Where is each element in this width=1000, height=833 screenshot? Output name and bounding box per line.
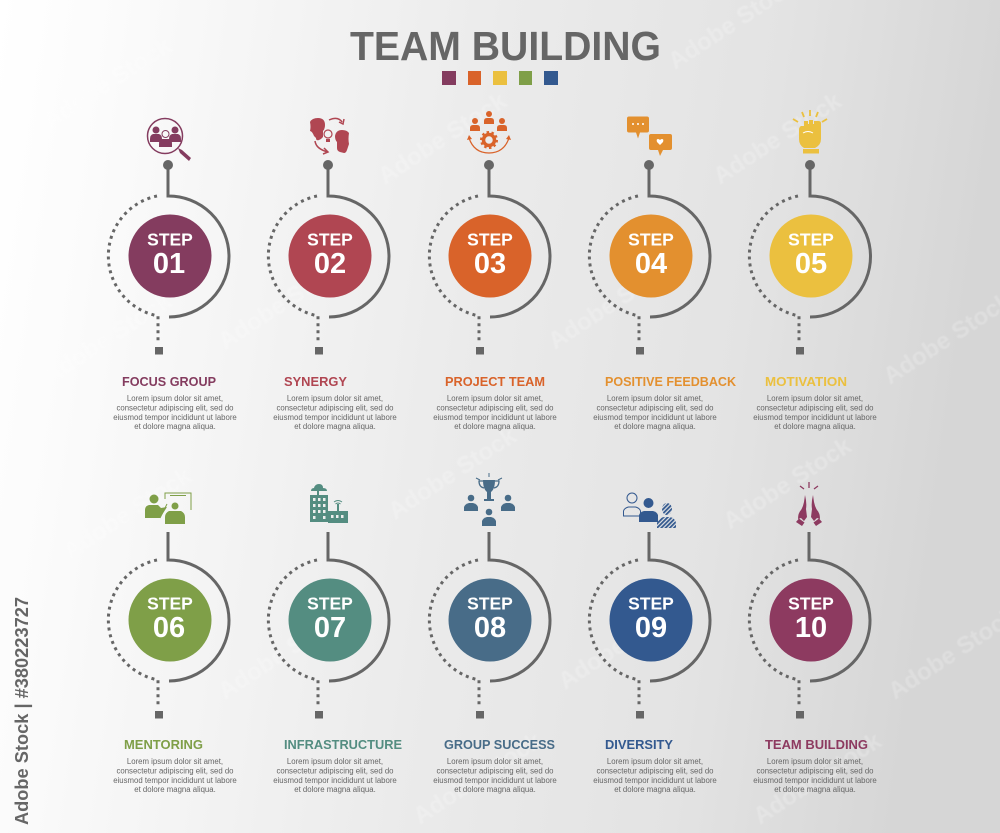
badge 02: 02 xyxy=(314,248,346,280)
description 08: et dolore magna aliqua. xyxy=(454,785,536,794)
heading: positive feedback: POSITIVE FEEDBACK xyxy=(605,374,737,389)
description 05: et dolore magna aliqua. xyxy=(774,422,856,431)
description 07: et dolore magna aliqua. xyxy=(294,785,376,794)
heading: motivation: MOTIVATION xyxy=(765,374,847,389)
badge 10: STEP xyxy=(788,594,834,614)
description 03: consectetur adipiscing elit, sed do xyxy=(436,404,554,412)
badge 09: STEP xyxy=(628,594,674,614)
description 05: Lorem ipsum dolor sit amet, xyxy=(767,394,863,403)
text: Adobe Stock xyxy=(709,87,847,190)
icon: connected building xyxy=(310,484,348,523)
badge 06: 06 xyxy=(153,612,185,644)
step 09 xyxy=(589,493,717,794)
description 10: eiusmod tempor incididunt ut labore xyxy=(753,776,877,785)
connector ring 08 xyxy=(429,532,550,718)
description 09: consectetur adipiscing elit, sed do xyxy=(596,766,714,776)
description 02: et dolore magna aliqua. xyxy=(294,422,376,431)
badge 03 xyxy=(448,214,532,298)
text: Adobe Stock xyxy=(409,727,547,830)
connector ring 03 xyxy=(429,160,550,354)
step 08 xyxy=(429,473,557,794)
icon: raised fist xyxy=(793,110,827,154)
description 08: eiusmod tempor incididunt ut labore xyxy=(433,776,557,785)
description 07: consectetur adipiscing elit, sed do xyxy=(276,766,394,776)
badge 09: 09 xyxy=(635,612,667,644)
connector ring 07 xyxy=(268,532,389,718)
icon: mentor and student xyxy=(145,493,191,524)
text: Adobe Stock xyxy=(544,252,682,355)
badge 01 xyxy=(128,214,212,298)
badge 04: STEP xyxy=(628,230,674,250)
icon: praying hands xyxy=(796,482,822,526)
description 01: consectetur adipiscing elit, sed do xyxy=(116,404,234,412)
badge 01: STEP xyxy=(147,230,193,250)
heading: mentoring: MENTORING xyxy=(124,737,203,752)
text: Adobe Stock xyxy=(719,432,857,535)
step 06 xyxy=(108,493,237,794)
description 04: Lorem ipsum dolor sit amet, xyxy=(607,394,703,403)
heading: project team: PROJECT TEAM xyxy=(445,374,545,389)
icon: speech bubbles xyxy=(627,116,672,156)
description 04: consectetur adipiscing elit, sed do xyxy=(596,404,714,412)
description 09: eiusmod tempor incididunt ut labore xyxy=(593,776,717,785)
description 03: Lorem ipsum dolor sit amet, xyxy=(447,394,543,403)
badge 06 xyxy=(128,578,212,662)
description 03: eiusmod tempor incididunt ut labore xyxy=(433,413,557,422)
badge 03: STEP xyxy=(467,230,513,250)
text: Adobe Stock xyxy=(749,727,887,830)
text: Adobe Stock xyxy=(384,422,522,525)
description 10: et dolore magna aliqua. xyxy=(774,785,856,794)
badge 06: STEP xyxy=(147,594,193,614)
description 08: consectetur adipiscing elit, sed do xyxy=(436,766,554,776)
badge 05 xyxy=(770,214,852,298)
description 07: eiusmod tempor incididunt ut labore xyxy=(273,776,397,785)
badge 08: STEP xyxy=(467,594,513,614)
description 01: et dolore magna aliqua. xyxy=(134,422,216,431)
description 01: Lorem ipsum dolor sit amet, xyxy=(127,394,223,403)
description 02: eiusmod tempor incididunt ut labore xyxy=(273,413,397,422)
badge 07: STEP xyxy=(307,594,353,614)
icon: team around gear xyxy=(467,111,511,153)
badge 03: 03 xyxy=(474,248,506,280)
description 09: Lorem ipsum dolor sit amet, xyxy=(607,757,703,766)
badge 10 xyxy=(770,578,852,662)
heading: group success: GROUP SUCCESS xyxy=(444,737,555,752)
connector ring 02 xyxy=(268,160,389,354)
icon: people under magnifier xyxy=(148,118,191,161)
description 01: eiusmod tempor incididunt ut labore xyxy=(113,413,237,422)
text: Adobe Stock xyxy=(374,87,512,190)
connector ring 10 xyxy=(749,532,870,718)
step 01 xyxy=(108,118,237,431)
description 08: Lorem ipsum dolor sit amet, xyxy=(447,757,543,766)
description 06: consectetur adipiscing elit, sed do xyxy=(116,766,234,776)
badge 07: 07 xyxy=(314,612,346,644)
description 03: et dolore magna aliqua. xyxy=(454,422,536,431)
heading: infrastructure: INFRASTRUCTURE xyxy=(284,737,402,752)
text: Adobe Stock xyxy=(59,462,197,565)
badge 08 xyxy=(448,578,532,662)
heading: focus group: FOCUS GROUP xyxy=(122,374,216,389)
connector ring 01 xyxy=(108,160,229,354)
step 04 xyxy=(589,116,737,431)
text: Adobe Stock xyxy=(214,602,352,705)
badge 07 xyxy=(288,578,372,662)
badge 02: STEP xyxy=(307,230,353,250)
badge 08: 08 xyxy=(474,612,506,644)
step 07 xyxy=(268,484,402,794)
description 10: Lorem ipsum dolor sit amet, xyxy=(767,757,863,766)
description 07: Lorem ipsum dolor sit amet, xyxy=(287,757,383,766)
text: Adobe Stock xyxy=(39,287,177,390)
description 05: consectetur adipiscing elit, sed do xyxy=(756,404,874,412)
description 02: Lorem ipsum dolor sit amet, xyxy=(287,394,383,403)
step 03 xyxy=(429,111,557,431)
connector ring 06 xyxy=(108,532,229,718)
stock id watermark: Adobe Stock | #380223727 xyxy=(12,597,32,825)
description 05: eiusmod tempor incididunt ut labore xyxy=(753,413,877,422)
heading: diversity: DIVERSITY xyxy=(605,737,673,752)
step 05 xyxy=(749,110,877,431)
description 04: et dolore magna aliqua. xyxy=(614,422,696,431)
icon: diverse people xyxy=(624,493,676,528)
badge 10: 10 xyxy=(795,612,827,644)
description 06: Lorem ipsum dolor sit amet, xyxy=(127,757,223,766)
connector ring 09 xyxy=(589,532,710,718)
badge 02 xyxy=(288,214,372,298)
step 02 xyxy=(268,118,397,431)
description 06: et dolore magna aliqua. xyxy=(134,785,216,794)
title: TEAM BUILDING xyxy=(350,23,661,69)
description 09: et dolore magna aliqua. xyxy=(614,785,696,794)
connector ring 05 xyxy=(749,160,870,354)
description 02: consectetur adipiscing elit, sed do xyxy=(276,404,394,412)
badge 01: 01 xyxy=(153,248,185,280)
heading: synergy: SYNERGY xyxy=(284,374,347,389)
text: Adobe Stock xyxy=(214,252,352,355)
badge 04 xyxy=(610,214,692,298)
badge 09 xyxy=(610,578,692,662)
description 06: eiusmod tempor incididunt ut labore xyxy=(113,776,237,785)
step 10 xyxy=(749,482,877,794)
badge 04: 04 xyxy=(635,248,667,280)
heading: team building: TEAM BUILDING xyxy=(765,737,868,752)
text: Adobe Stock xyxy=(554,592,692,695)
icon: trophy and team xyxy=(464,473,515,526)
description 10: consectetur adipiscing elit, sed do xyxy=(756,766,874,776)
badge 05: STEP xyxy=(788,230,834,250)
colour legend squares xyxy=(442,71,558,85)
description 04: eiusmod tempor incididunt ut labore xyxy=(593,413,717,422)
badge 05: 05 xyxy=(795,248,827,280)
connector ring 04 xyxy=(589,160,710,354)
text: Adobe Stock xyxy=(39,32,177,135)
icon: synergy heads xyxy=(310,118,349,154)
